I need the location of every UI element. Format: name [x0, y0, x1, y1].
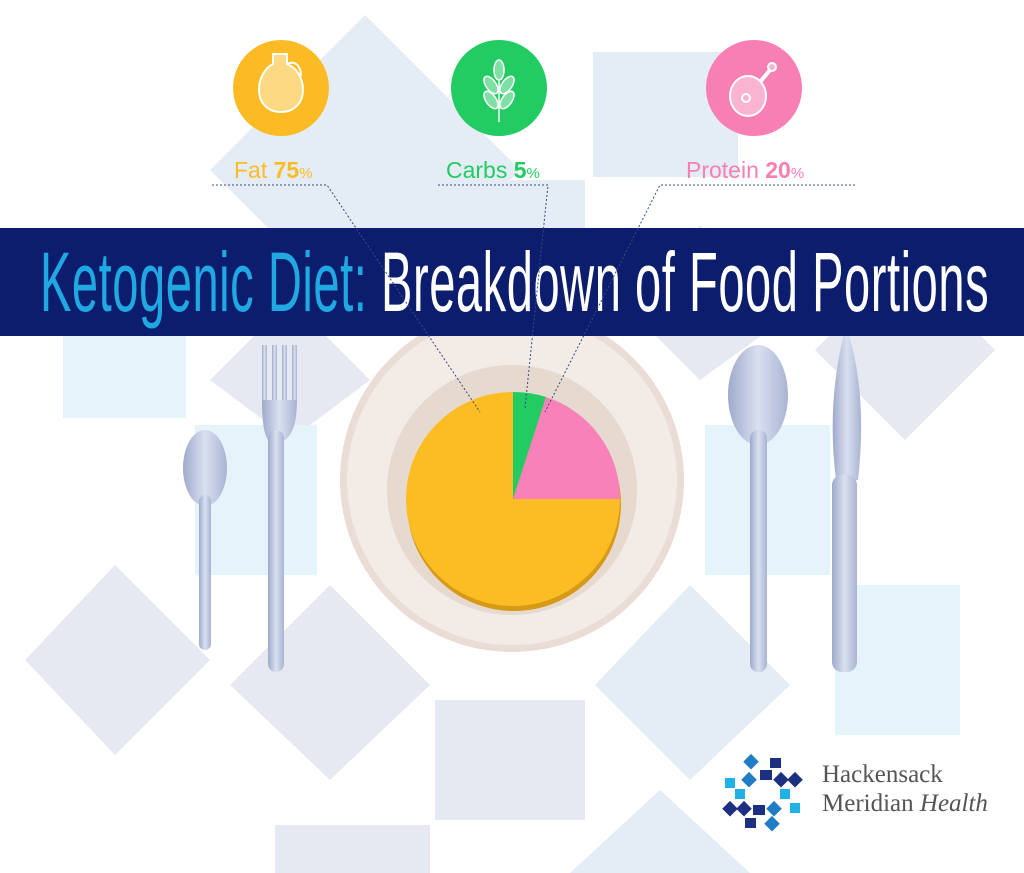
- label: protein: Protein 20%: [686, 157, 804, 183]
- icon: fat jug: [233, 40, 329, 136]
- icon: ham: [706, 40, 802, 136]
- logo: Meridian Health: [822, 790, 988, 817]
- label: fat: Fat 75%: [234, 157, 313, 183]
- logo: Hackensack: [822, 761, 943, 788]
- logo: [722, 754, 988, 832]
- icon: wheat: [451, 40, 547, 136]
- cutlery: [183, 326, 861, 672]
- title band: [0, 228, 1024, 336]
- title: Ketogenic Diet: Breakdown of Food Portions: [40, 235, 989, 329]
- label: carbs: Carbs 5%: [446, 157, 540, 183]
